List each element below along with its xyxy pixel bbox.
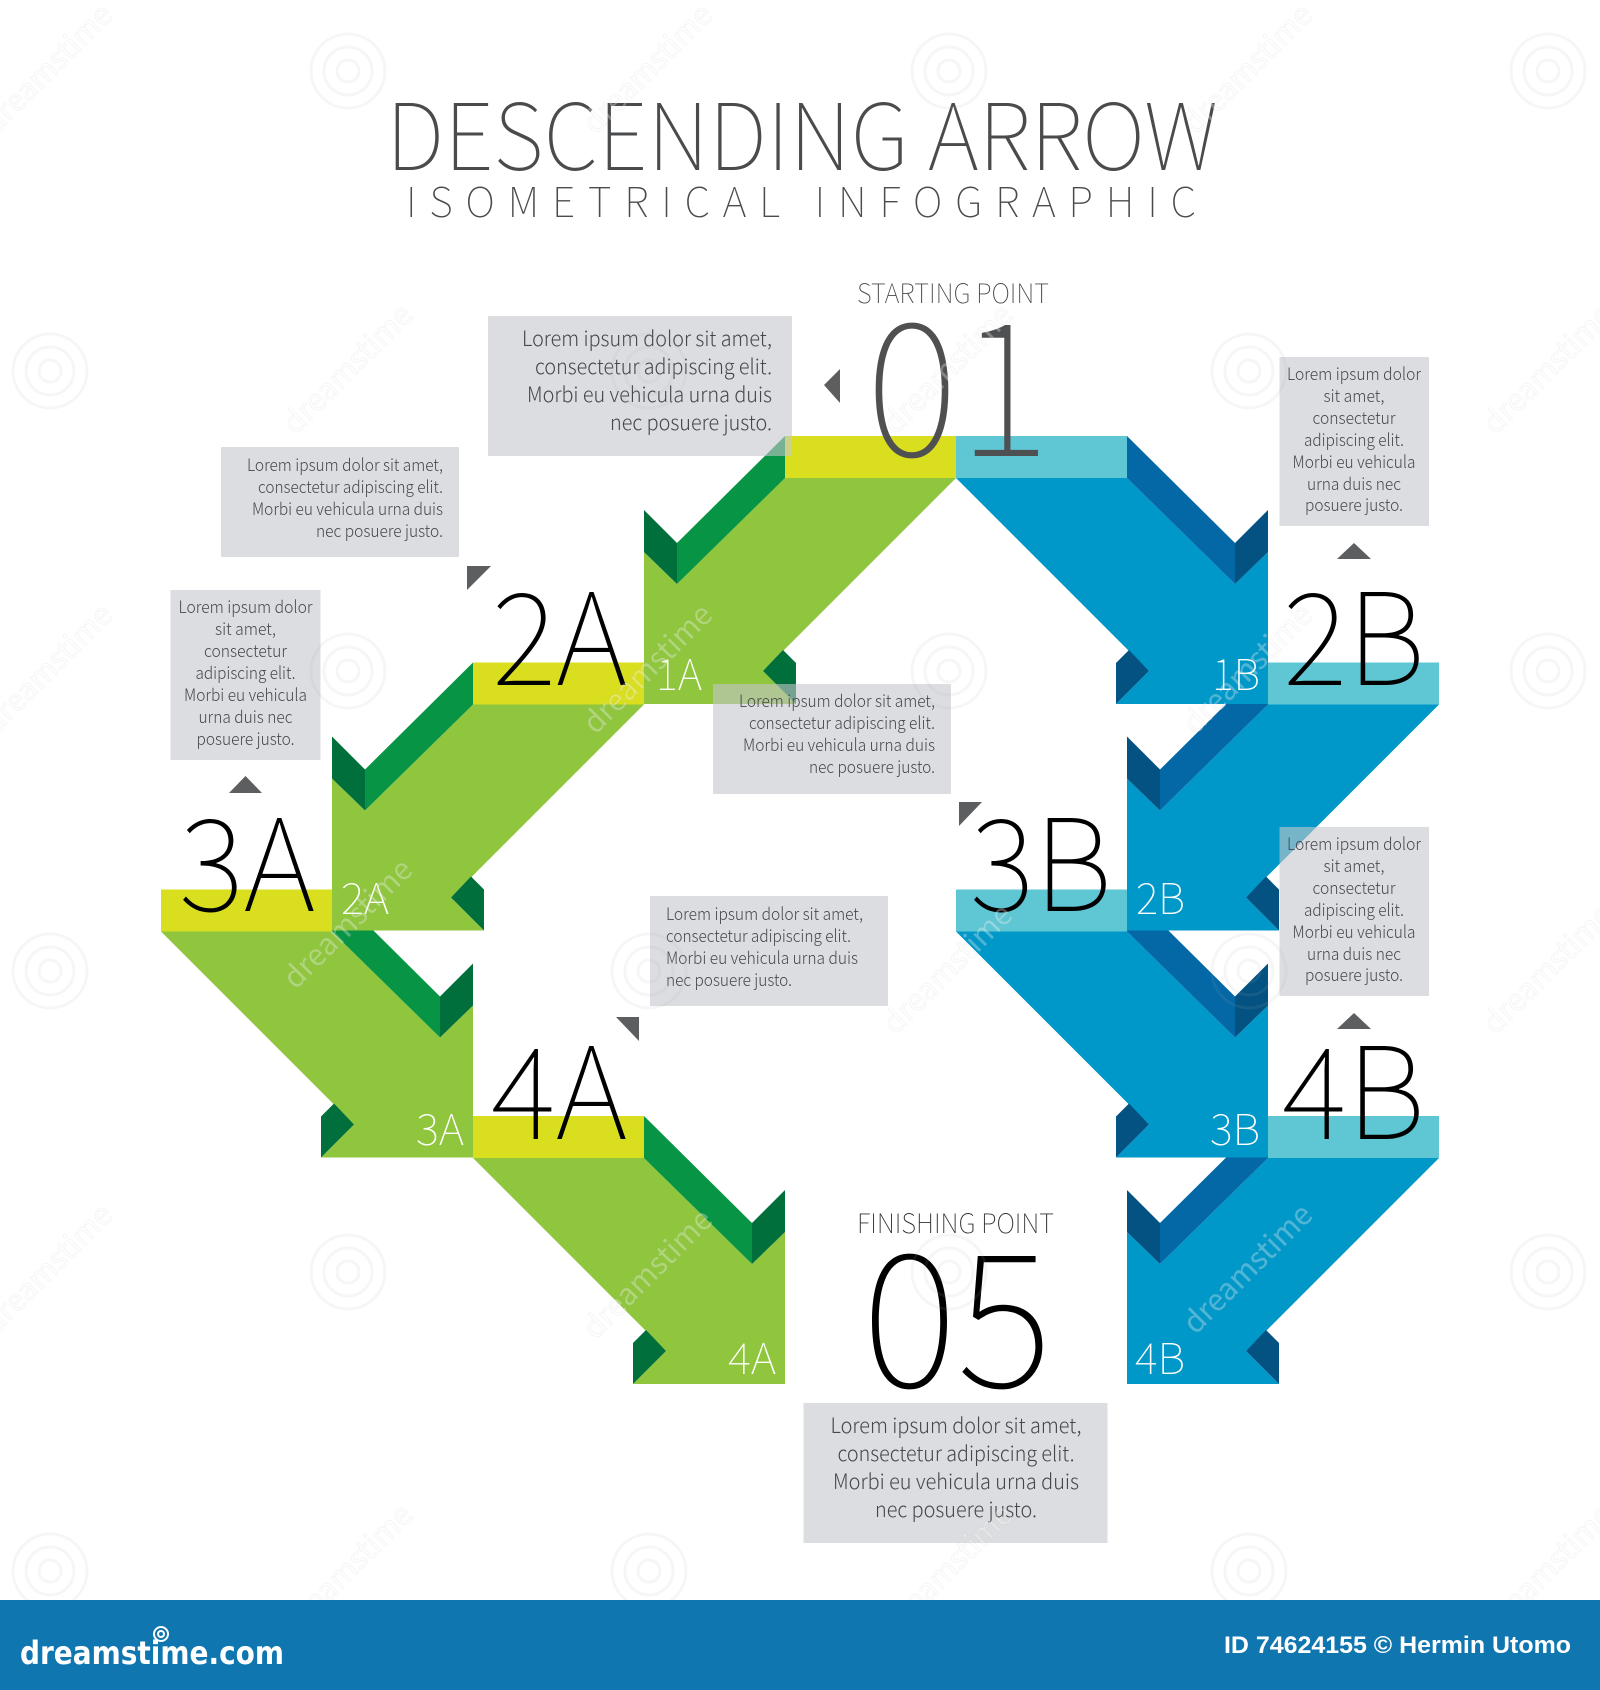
watermark text: dreamstime (271, 847, 421, 997)
corner triangle by 3B (959, 802, 982, 826)
label 4B: 4B (1135, 1325, 1185, 1387)
label 4A: 4A (728, 1325, 776, 1387)
step number 3B: 3B (970, 763, 1112, 948)
watermark text: dreamstime (1171, 592, 1321, 742)
text box: step 4A: nec posuere justo. (666, 966, 792, 991)
text box: step 2B: posuere justo. (1305, 491, 1403, 516)
text box: step 2B: Lorem ipsum dolor (1287, 360, 1422, 385)
text box: step 2A (221, 447, 459, 557)
watermark text: dreamstime (571, 592, 721, 742)
corner triangle by 2A (467, 566, 491, 590)
arrow 4B (1127, 1116, 1439, 1384)
finishing number 05: 05 (862, 1171, 1052, 1441)
starting point label: STARTING POINT (857, 272, 1049, 311)
text box: step 1A upper: consectetur adipiscing elit. (535, 351, 772, 381)
arrow 3A (161, 890, 473, 1158)
text box: step 2B: adipiscing elit. (1304, 426, 1404, 451)
text box: step 4B: adipiscing elit. (1304, 896, 1404, 921)
text box: finishing point (804, 1403, 1108, 1543)
text box: step 1A lower: Lorem ipsum dolor sit amet, (739, 687, 935, 712)
watermark text: dreamstime (271, 1492, 421, 1642)
starting number 01: 01 (866, 240, 1050, 510)
text box: step 3A: posuere justo. (196, 725, 294, 750)
text box: step 1A upper: nec posuere justo. (610, 407, 772, 437)
text box: step 1A upper (488, 316, 792, 456)
text box: step 1A lower (713, 684, 951, 794)
text box: step 3A: sit amet, (215, 615, 276, 640)
label 1A: 1A (656, 641, 702, 703)
text box: step 2B (1280, 357, 1429, 526)
text box: step 4B: consectetur (1312, 874, 1396, 899)
arrow 1B (956, 436, 1268, 704)
step number 2B: 2B (1283, 537, 1425, 722)
text box: finishing point: nec posuere justo. (875, 1494, 1037, 1524)
step number 3A: 3A (179, 763, 315, 948)
watermark text: dreamstime (271, 292, 421, 442)
step number 2A: 2A (492, 537, 627, 722)
text box: step 1A lower: consectetur adipiscing elit. (749, 709, 935, 734)
text box: step 3A: Morbi eu vehicula (184, 681, 307, 706)
text box: step 4B: Morbi eu vehicula (1292, 918, 1416, 943)
triangle above 4B (1337, 1013, 1371, 1029)
text box: step 2B: sit amet, (1324, 382, 1384, 407)
text box: step 3A: urna duis nec (198, 703, 292, 728)
finishing point label: FINISHING POINT (857, 1202, 1054, 1241)
arrow 1A (644, 436, 956, 704)
text box: step 3A: Lorem ipsum dolor (178, 593, 313, 618)
text box: step 4A: consectetur adipiscing elit. (666, 922, 851, 947)
label 2A: 2A (341, 865, 389, 927)
text box: step 2A: Morbi eu vehicula urna duis (252, 495, 443, 520)
footer credit: ID 74624155 © Hermin Utomo (1224, 1632, 1571, 1659)
corner triangle by 4A (616, 1017, 639, 1041)
watermark text: dreamstime (871, 1492, 1021, 1642)
arrow 3B (956, 890, 1268, 1158)
step number 4B: 4B (1282, 991, 1425, 1176)
text box: step 1A lower: nec posuere justo. (809, 753, 935, 778)
label 3B: 3B (1210, 1096, 1260, 1158)
arrow 2A (332, 662, 644, 930)
watermark text: dreamstime (871, 892, 1021, 1042)
text box: step 2A: nec posuere justo. (316, 517, 443, 542)
footer logo spiral (154, 1627, 168, 1641)
footer bar (0, 1600, 1600, 1690)
text box: step 4B (1280, 827, 1429, 996)
watermark text: dreamstime (1171, 1192, 1321, 1342)
watermark text: dreamstime (871, 292, 1021, 442)
watermark text: dreamstime (571, 1197, 721, 1347)
text box: step 1A lower: Morbi eu vehicula urna duis (743, 731, 935, 756)
text box: step 4A (650, 896, 888, 1006)
subtitle: ISOMETRICAL INFOGRAPHIC (406, 169, 1196, 229)
text box: step 4A: Morbi eu vehicula urna duis (666, 944, 858, 969)
footer logo: dreamstime.com (20, 1634, 284, 1672)
label 2B: 2B (1136, 865, 1185, 927)
text box: step 4B: sit amet, (1324, 852, 1384, 877)
text box: step 2B: consectetur (1312, 404, 1396, 429)
text box: step 2A: consectetur adipiscing elit. (258, 473, 443, 498)
text box: step 3A: adipiscing elit. (196, 659, 296, 684)
text box: step 3A: consectetur (204, 637, 288, 662)
title: DESCENDING ARROW (386, 64, 1218, 197)
text box: finishing point: Morbi eu vehicula urna duis (833, 1466, 1079, 1496)
text box: finishing point: consectetur adipiscing elit. (838, 1438, 1074, 1468)
text box: step 2B: urna duis nec (1307, 470, 1401, 495)
text box: step 4B: urna duis nec (1307, 940, 1401, 965)
text box: step 2B: Morbi eu vehicula (1292, 448, 1416, 473)
arrow 2B (1127, 662, 1439, 930)
text box: step 2A: Lorem ipsum dolor sit amet, (247, 451, 443, 476)
step number 4A: 4A (491, 991, 627, 1176)
text box: finishing point: Lorem ipsum dolor sit amet, (830, 1410, 1082, 1440)
label 1B: 1B (1212, 641, 1260, 703)
text box: step 3A (170, 590, 320, 760)
triangle above 2B (1337, 543, 1371, 559)
triangle left of 01 (824, 369, 840, 403)
arrow labels (341, 641, 1260, 1387)
triangle above 3A (229, 776, 262, 793)
pointer triangles (229, 369, 1371, 1041)
text box: step 4B: posuere justo. (1305, 961, 1403, 986)
text box: step 1A upper: Lorem ipsum dolor sit amet, (522, 323, 772, 353)
label 3A: 3A (416, 1096, 464, 1158)
text box: step 1A upper: Morbi eu vehicula urna duis (527, 379, 772, 409)
text box: step 4A: Lorem ipsum dolor sit amet, (666, 900, 863, 925)
text box: step 4B: Lorem ipsum dolor (1287, 830, 1422, 855)
arrow 4A (473, 1116, 785, 1384)
